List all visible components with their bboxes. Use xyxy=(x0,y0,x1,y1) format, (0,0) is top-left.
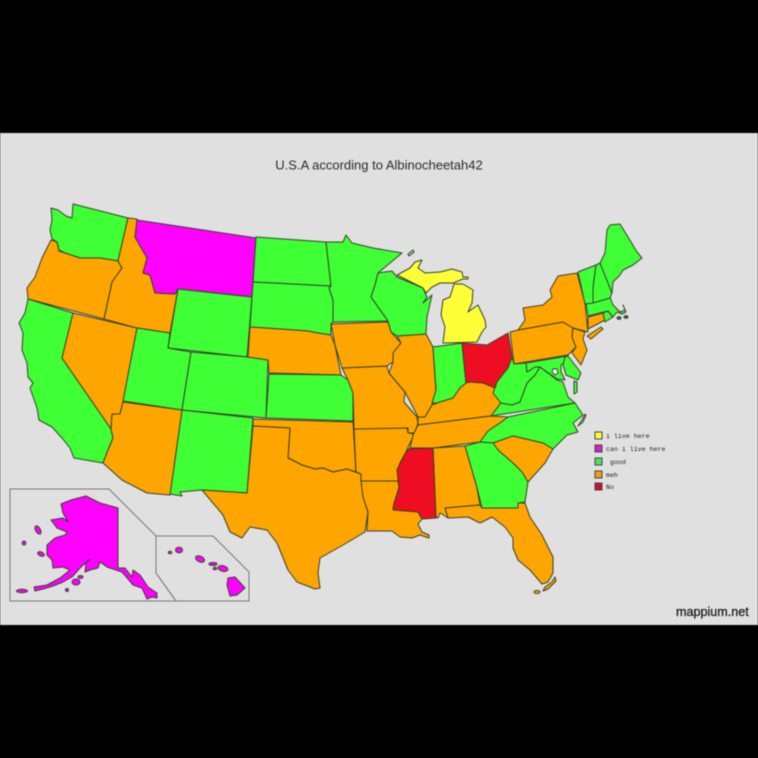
state: Missouri xyxy=(342,366,418,433)
state: Virginia xyxy=(491,367,575,416)
state: North Carolina xyxy=(480,403,583,449)
state: Colorado xyxy=(182,352,268,418)
state: West Virginia xyxy=(493,357,540,405)
state: Oklahoma xyxy=(253,419,356,472)
state: Tennessee xyxy=(410,416,508,448)
state: Kansas xyxy=(266,374,353,421)
inset frames for Alaska and Hawaii xyxy=(10,489,249,601)
state: Texas xyxy=(202,426,368,589)
long island xyxy=(587,327,603,339)
state: New Jersey xyxy=(572,328,587,365)
state: Hawaii xyxy=(168,547,245,596)
state: Alaska xyxy=(16,496,157,599)
state: Iowa xyxy=(331,322,401,368)
state: New Hampshire xyxy=(593,263,612,303)
alaska islands xyxy=(16,525,83,593)
state: South Dakota xyxy=(250,282,333,335)
legend item: No: No xyxy=(606,484,614,491)
nantucket xyxy=(624,316,628,318)
state: Utah xyxy=(123,328,191,410)
state: Indiana xyxy=(432,343,466,403)
state: Minnesota xyxy=(326,235,402,322)
state: Ohio xyxy=(462,333,512,388)
islands off Massachusetts xyxy=(617,317,621,319)
state: Illinois xyxy=(389,334,436,417)
state: Georgia xyxy=(465,442,528,508)
legend item: i live here: i live here xyxy=(606,433,650,440)
state: Maine xyxy=(600,224,642,293)
legend xyxy=(595,432,665,491)
state: Louisiana xyxy=(361,481,429,538)
state: Montana xyxy=(135,220,256,297)
legend item: meh: meh xyxy=(606,472,618,479)
state: Mississippi xyxy=(393,448,436,519)
state: New York xyxy=(518,273,588,332)
state: Alabama xyxy=(433,446,480,518)
state: Nebraska xyxy=(248,327,341,375)
florida key small xyxy=(534,590,540,594)
state: Michigan lower peninsula xyxy=(441,284,486,343)
state: Wyoming xyxy=(168,289,252,357)
state: Rhode Island xyxy=(603,311,613,322)
title: U.S.A according to Albinocheetah42 xyxy=(275,158,483,172)
state: Massachusetts xyxy=(586,297,626,317)
state: Oregon xyxy=(27,240,122,319)
state: Washington xyxy=(50,204,128,261)
state: Florida xyxy=(445,503,553,584)
alaska mainland xyxy=(34,496,157,599)
isle royale xyxy=(408,250,414,256)
state: Arizona xyxy=(103,402,182,495)
outer banks xyxy=(578,414,586,426)
state: Idaho xyxy=(104,218,178,333)
florida keys xyxy=(543,577,556,591)
state: Pennsylvania xyxy=(510,322,576,364)
state: Virginia eastern shore xyxy=(574,381,577,394)
state: Connecticut xyxy=(588,313,605,329)
state: California xyxy=(19,299,113,463)
source credit: mappium.net xyxy=(676,605,749,619)
legend item: can i live here: can i live here xyxy=(606,446,665,453)
state: Vermont xyxy=(578,265,596,304)
district of Columbia xyxy=(552,369,558,375)
map of the contiguous United States xyxy=(19,204,642,594)
state: Wisconsin xyxy=(371,271,432,336)
state: North Dakota xyxy=(253,237,331,286)
state: Delaware and Maryland eastern shore xyxy=(563,356,581,380)
state: Arkansas xyxy=(354,427,415,481)
map panel background xyxy=(0,133,758,625)
legend item: good: good xyxy=(610,459,626,466)
state: Michigan upper peninsula xyxy=(397,260,468,293)
state: South Carolina xyxy=(493,436,553,482)
state: Kentucky xyxy=(418,382,501,425)
state: Nevada xyxy=(62,313,137,429)
state: New Mexico xyxy=(170,410,253,496)
state: Maryland xyxy=(526,356,568,380)
